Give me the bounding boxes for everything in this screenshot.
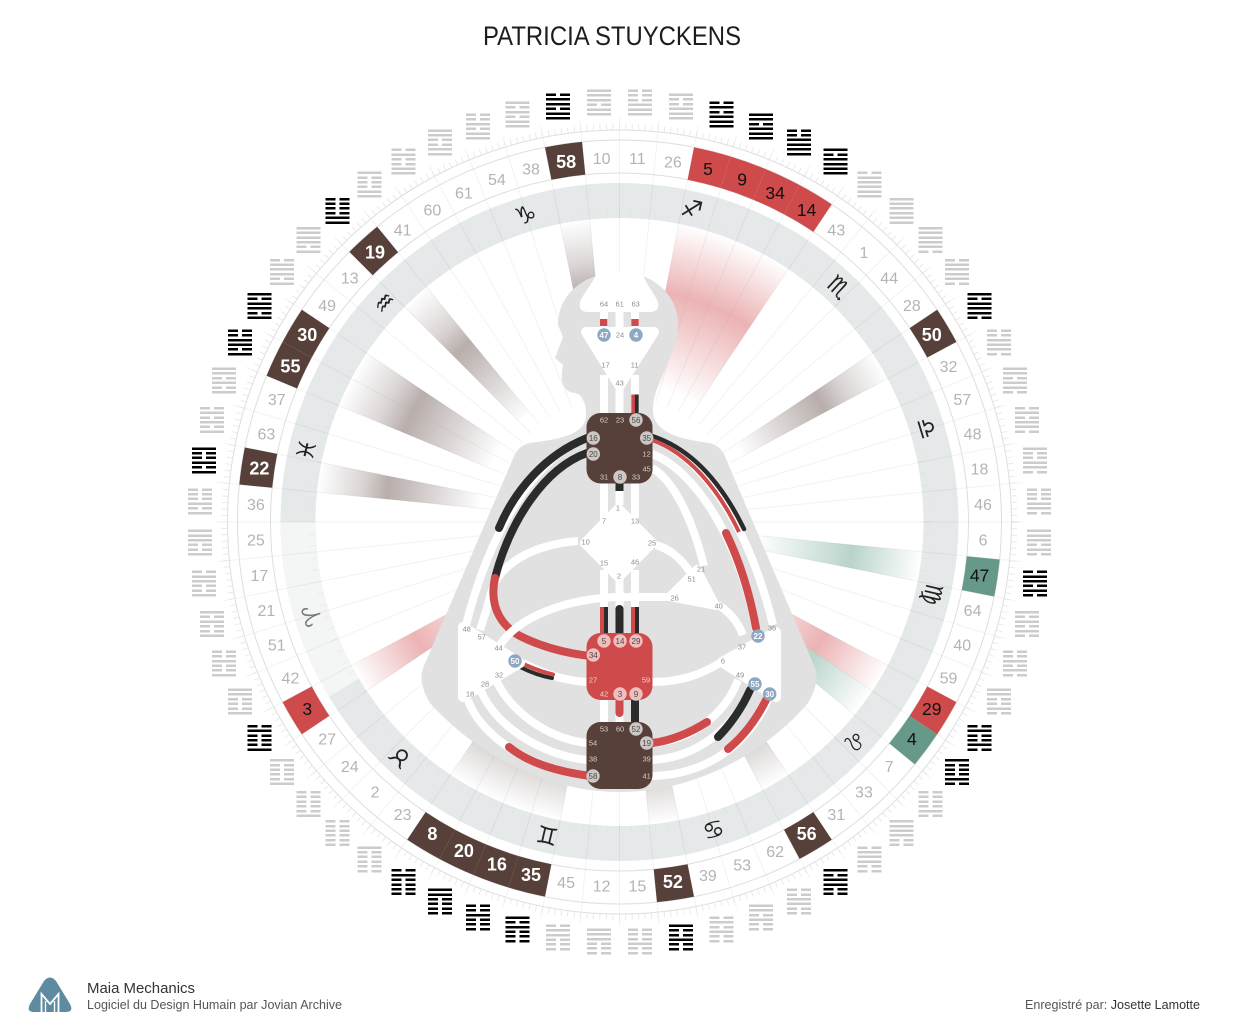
gate number ring: 36 bbox=[247, 497, 265, 514]
gate numbers on light centers bbox=[463, 300, 776, 699]
gate numbers on light centers: 17 bbox=[602, 361, 610, 370]
gate number ring: 10 bbox=[593, 151, 611, 168]
gate number ring: 58 bbox=[556, 152, 576, 172]
active gate numbers: 56 bbox=[632, 416, 641, 425]
active gate numbers: 34 bbox=[589, 651, 598, 660]
gate numbers on light centers: 40 bbox=[715, 602, 723, 611]
gate numbers on light centers: 7 bbox=[602, 517, 606, 526]
gate number ring: 59 bbox=[940, 670, 958, 687]
logo bbox=[29, 978, 71, 1012]
gate numbers on brown centers: 12 bbox=[643, 450, 651, 459]
gate number ring: 53 bbox=[733, 858, 751, 875]
gate number ring: 46 bbox=[974, 497, 992, 514]
zodiac symbols: ♈︎ bbox=[296, 601, 329, 630]
gate numbers on light centers: 32 bbox=[495, 671, 503, 680]
gate number ring: 8 bbox=[427, 824, 437, 844]
gate number ring: 15 bbox=[628, 878, 646, 895]
gate numbers on light centers: 28 bbox=[481, 680, 489, 689]
gate numbers on brown centers: 38 bbox=[589, 755, 597, 764]
hexagram ring bbox=[188, 91, 1051, 953]
blue gate numbers: 50 bbox=[511, 657, 520, 666]
channel 44-26 bbox=[500, 597, 668, 645]
sacral gate markers bbox=[587, 634, 643, 701]
gate number ring: 34 bbox=[765, 183, 785, 203]
gate number ring: 19 bbox=[365, 242, 385, 262]
gate number ring: 23 bbox=[394, 807, 412, 824]
gate numbers on light centers: 43 bbox=[616, 379, 624, 388]
active gate numbers bbox=[589, 416, 652, 781]
gate number ring: 42 bbox=[282, 670, 299, 687]
zodiac symbols: ♉︎ bbox=[383, 739, 418, 774]
blue gate numbers: 22 bbox=[754, 632, 763, 641]
gate numbers on light centers: 44 bbox=[495, 644, 503, 653]
zodiac symbols: ♎︎ bbox=[910, 414, 943, 443]
gate number ring: 50 bbox=[922, 325, 942, 345]
gate numbers on light centers: 18 bbox=[466, 690, 474, 699]
gate numbers on brown centers: 62 bbox=[600, 416, 608, 425]
active gate numbers: 3 bbox=[618, 690, 623, 699]
gate numbers on brown centers: 53 bbox=[600, 725, 608, 734]
solar plexus center bbox=[722, 632, 776, 697]
zodiac symbols: ♓︎ bbox=[291, 436, 323, 463]
activation beams bbox=[317, 219, 922, 825]
zodiac symbols: ♋︎ bbox=[699, 812, 728, 846]
gate number ring: 37 bbox=[268, 392, 286, 409]
gate number ring: 57 bbox=[953, 392, 971, 409]
root center bbox=[586, 722, 652, 789]
gate numbers on light centers: 15 bbox=[600, 559, 608, 568]
gate numbers on light centers: 61 bbox=[616, 300, 624, 309]
active gate numbers: 14 bbox=[616, 637, 625, 646]
red head-ajna activations bbox=[600, 319, 639, 326]
gate numbers on light centers: 51 bbox=[688, 575, 696, 584]
active gate numbers: 9 bbox=[634, 690, 639, 699]
active channels bbox=[493, 394, 766, 776]
body graph bbox=[422, 272, 816, 792]
gate numbers on sacral bbox=[589, 676, 650, 699]
blue gate numbers: 30 bbox=[765, 690, 775, 699]
active gate numbers: 52 bbox=[632, 725, 641, 734]
zodiac symbols: ♒︎ bbox=[367, 286, 402, 320]
gate number ring: 41 bbox=[394, 222, 412, 239]
sacral center bbox=[586, 633, 652, 700]
gate numbers on light centers: 25 bbox=[648, 539, 656, 548]
gate numbers on brown centers: 54 bbox=[589, 739, 597, 748]
gate number ring: 31 bbox=[827, 807, 845, 824]
gate numbers on light centers: 26 bbox=[671, 594, 679, 603]
gate numbers on brown centers: 41 bbox=[643, 772, 651, 781]
gate number ring: 4 bbox=[907, 729, 917, 749]
gate number ring: 6 bbox=[979, 533, 988, 550]
gate numbers on light centers: 37 bbox=[738, 643, 746, 652]
blue gate markers bbox=[508, 328, 776, 701]
body silhouette bbox=[422, 272, 816, 792]
zodiac symbols: ♏︎ bbox=[821, 270, 856, 305]
gate number ring: 63 bbox=[258, 426, 275, 443]
gate number ring: 43 bbox=[827, 222, 845, 239]
head center bbox=[580, 272, 658, 312]
gate number ring: 33 bbox=[855, 785, 873, 802]
band arcs and ticks bbox=[224, 127, 1014, 917]
spleen center bbox=[463, 627, 520, 697]
gate numbers on sacral: 59 bbox=[642, 676, 650, 685]
gate number ring: 32 bbox=[940, 359, 958, 376]
gate number ring: 14 bbox=[797, 200, 817, 220]
gate number ring: 21 bbox=[258, 603, 275, 620]
gate numbers on sacral: 42 bbox=[600, 690, 608, 699]
active gate numbers: 16 bbox=[589, 434, 598, 443]
gate number ring: 54 bbox=[488, 172, 506, 189]
footer brand bbox=[87, 980, 342, 1012]
gate number ring: 60 bbox=[423, 203, 441, 220]
gate number ring: 45 bbox=[557, 875, 575, 892]
active gate numbers: 5 bbox=[602, 637, 607, 646]
zodiac symbols bbox=[291, 193, 948, 851]
gate numbers on light centers: 49 bbox=[736, 671, 744, 680]
gate number ring: 25 bbox=[247, 533, 265, 550]
gate numbers on brown centers: 39 bbox=[643, 755, 651, 764]
gate numbers on light centers: 46 bbox=[631, 558, 639, 567]
zodiac symbols: ♊︎ bbox=[534, 819, 561, 851]
throat center bbox=[586, 413, 652, 484]
gate numbers on light centers: 13 bbox=[631, 517, 639, 526]
radial gate lines bbox=[216, 118, 1024, 926]
zodiac symbols: ♑︎ bbox=[511, 198, 540, 232]
gate number ring: 16 bbox=[487, 855, 507, 875]
gate number ring: 17 bbox=[251, 568, 268, 585]
gate markers bbox=[586, 413, 653, 783]
active gate numbers: 19 bbox=[642, 739, 652, 748]
gate number ring: 40 bbox=[953, 637, 971, 654]
gate numbers on light centers: 1 bbox=[616, 504, 620, 513]
gate numbers on brown centers: 33 bbox=[632, 473, 640, 482]
blue gate numbers bbox=[511, 331, 775, 699]
gate number ring: 18 bbox=[971, 461, 989, 478]
gate number ring: 47 bbox=[970, 565, 989, 585]
gate number ring: 38 bbox=[522, 162, 540, 179]
gate number ring: 13 bbox=[341, 270, 359, 287]
gate numbers on brown centers bbox=[589, 416, 651, 781]
gate number ring: 9 bbox=[737, 169, 747, 189]
gate number ring: 11 bbox=[629, 151, 646, 168]
gate numbers on light centers: 48 bbox=[463, 625, 471, 634]
gate number ring: 48 bbox=[964, 426, 982, 443]
gate number ring: 30 bbox=[297, 325, 317, 345]
gate number ring: 44 bbox=[880, 270, 898, 287]
gate number ring: 56 bbox=[797, 824, 817, 844]
gate number ring: 61 bbox=[455, 186, 473, 203]
gate number ring: 64 bbox=[964, 603, 982, 620]
blue gate numbers: 4 bbox=[634, 331, 639, 340]
gate number ring: 28 bbox=[903, 298, 921, 315]
footer credit: Enregistré par: Josette Lamotte bbox=[1025, 997, 1200, 1012]
footer brand: Maia Mechanics bbox=[87, 980, 195, 997]
gate number ring: 26 bbox=[664, 155, 682, 172]
gate numbers on light centers: 64 bbox=[600, 300, 608, 309]
gate number ring: 22 bbox=[249, 459, 269, 479]
gate number ring: 3 bbox=[302, 699, 312, 719]
title: PATRICIA STUYCKENS bbox=[483, 21, 741, 51]
gate number ring: 62 bbox=[766, 844, 784, 861]
gate number ring: 52 bbox=[663, 872, 683, 892]
white channels bbox=[466, 312, 773, 776]
gate number ring: 7 bbox=[885, 759, 894, 776]
active gate numbers: 58 bbox=[589, 772, 598, 781]
gate number ring: 27 bbox=[318, 732, 336, 749]
zodiac symbols: ♍︎ bbox=[916, 581, 948, 608]
footer brand: Logiciel du Design Humain par Jovian Archive bbox=[87, 997, 342, 1012]
gate number ring: 29 bbox=[922, 699, 941, 719]
gate number ring bbox=[239, 141, 1000, 903]
gate numbers on light centers: 57 bbox=[478, 633, 486, 642]
active gate numbers: 29 bbox=[632, 637, 641, 646]
gate numbers on light centers: 10 bbox=[582, 538, 590, 547]
gate number ring: 51 bbox=[268, 637, 286, 654]
gate numbers on brown centers: 31 bbox=[600, 473, 608, 482]
gate numbers on light centers: 21 bbox=[697, 565, 705, 574]
zodiac symbols: ♐︎ bbox=[678, 193, 705, 225]
gate numbers on light centers: 36 bbox=[768, 624, 776, 633]
gate numbers on brown centers: 45 bbox=[643, 465, 651, 474]
blue gate numbers: 47 bbox=[600, 331, 609, 340]
gate numbers on sacral: 27 bbox=[589, 676, 597, 685]
gate number ring: 55 bbox=[280, 356, 300, 376]
gate number ring: 1 bbox=[859, 245, 868, 262]
blue gate numbers: 55 bbox=[751, 680, 760, 689]
gate number ring: 49 bbox=[318, 298, 336, 315]
gate number ring: 20 bbox=[454, 841, 474, 861]
gate number ring: 12 bbox=[593, 878, 611, 895]
gate numbers on brown centers: 23 bbox=[616, 416, 624, 425]
gate number ring: 2 bbox=[371, 785, 380, 802]
gate numbers on light centers: 24 bbox=[616, 331, 624, 340]
g center bbox=[585, 509, 652, 577]
active gate numbers: 8 bbox=[618, 473, 623, 482]
gate numbers on light centers: 63 bbox=[632, 300, 640, 309]
gate number ring: 35 bbox=[521, 865, 541, 885]
zodiac symbols: ♌︎ bbox=[837, 724, 872, 758]
active gate numbers: 35 bbox=[642, 434, 652, 443]
gate numbers on light centers: 11 bbox=[631, 361, 639, 370]
gate numbers on light centers: 2 bbox=[617, 572, 621, 581]
ajna center bbox=[586, 332, 654, 386]
gate number ring: 5 bbox=[703, 159, 713, 179]
heart center bbox=[669, 569, 716, 606]
gate numbers on brown centers: 60 bbox=[616, 725, 624, 734]
active gate numbers: 20 bbox=[589, 450, 598, 459]
zodiac ring bbox=[280, 200, 941, 844]
gate number ring: 39 bbox=[699, 868, 717, 885]
gate number ring: 24 bbox=[341, 759, 359, 776]
gate numbers on light centers: 6 bbox=[721, 657, 725, 666]
